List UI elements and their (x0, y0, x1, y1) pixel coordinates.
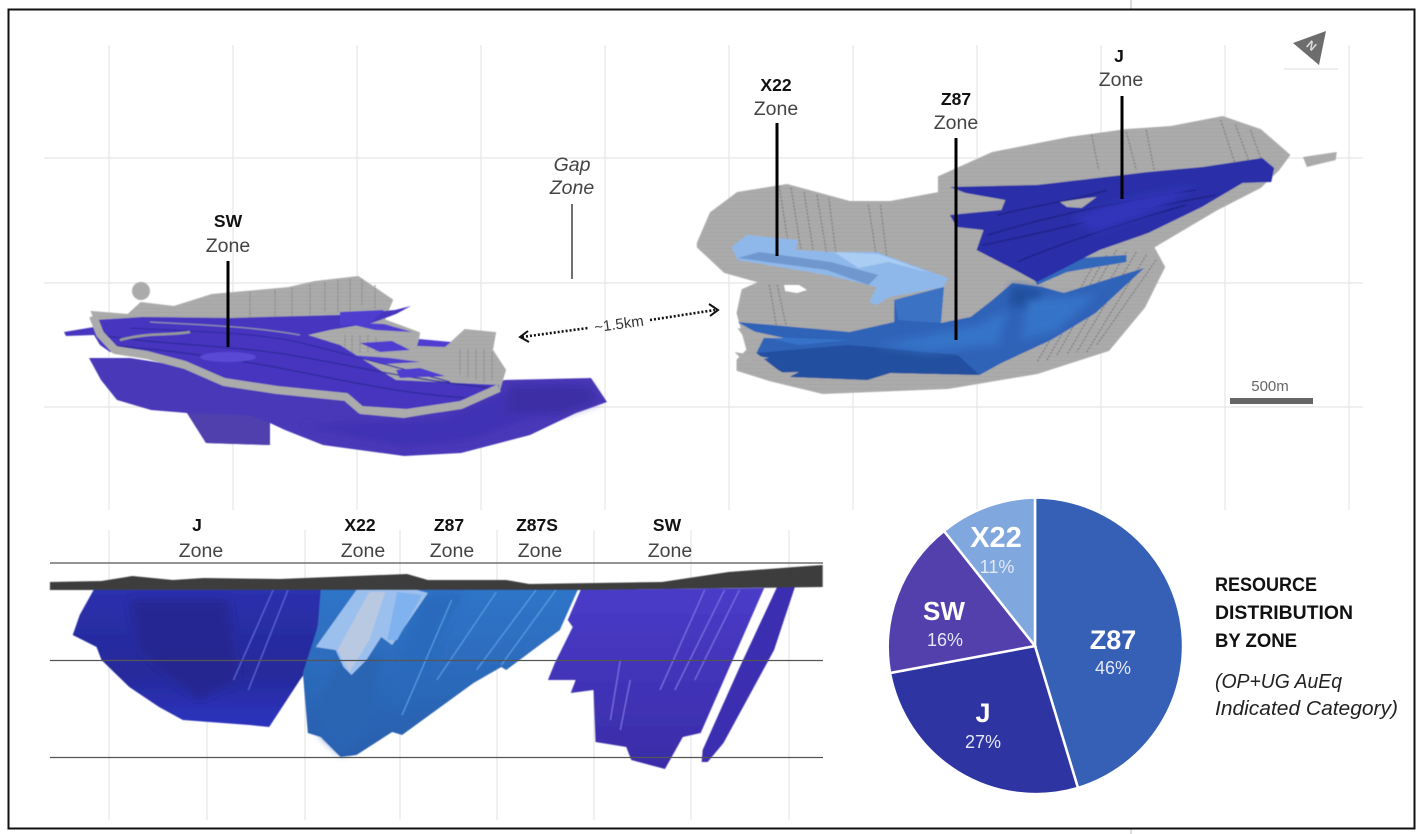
X22 plan label: X22 (760, 75, 792, 95)
section: J zone (73, 590, 323, 727)
section: Z87 zone (303, 590, 578, 757)
chart title: (OP+UG AuEq (1215, 671, 1342, 693)
chart title: DISTRIBUTION (1215, 603, 1353, 624)
slice: SW (888, 531, 1035, 673)
section Z87 label (430, 515, 474, 562)
section X22 label (341, 515, 385, 562)
section depth lines (50, 563, 823, 758)
section: X22 zone (316, 590, 428, 675)
north arrow: N (1304, 38, 1319, 54)
J plan label (1099, 46, 1143, 199)
pie chart (888, 498, 1183, 794)
SW plan label (206, 211, 250, 347)
section J label: J (192, 515, 202, 535)
pie labels: 27% (965, 732, 1001, 752)
SW zone 3D model (64, 277, 607, 456)
pie labels: 11% (980, 557, 1014, 577)
scale bar (1230, 378, 1313, 404)
section Z87S label: Zone (518, 540, 562, 562)
Gap label: Gap (554, 154, 591, 176)
section SW label (648, 515, 692, 562)
section: SW zone (548, 587, 795, 769)
pie labels: Z87 (1090, 625, 1136, 655)
slice: Z87 (1035, 498, 1183, 788)
north arrow (1284, 31, 1338, 69)
J plan label: Zone (1099, 69, 1143, 91)
SW plan label: Zone (206, 235, 250, 257)
section view (50, 565, 823, 769)
distance arrow (520, 304, 718, 342)
scale bar: 500m (1251, 378, 1289, 395)
section J label (179, 515, 223, 562)
section SW label: SW (653, 515, 682, 535)
Gap label (549, 154, 594, 279)
chart title: Indicated Category) (1215, 698, 1398, 720)
chart title: RESOURCE (1215, 575, 1317, 596)
pie labels: 46% (1095, 658, 1131, 678)
distance arrow: ~1.5km (593, 313, 645, 336)
section Z87 label: Zone (430, 540, 474, 562)
section SW label: Zone (648, 540, 692, 562)
SW plan label: SW (214, 211, 243, 231)
Eastern zones 3D model (698, 117, 1337, 393)
pie labels: J (975, 698, 991, 728)
section Z87S label (516, 515, 562, 562)
slice: J (890, 646, 1078, 794)
plan view grid (44, 45, 1363, 510)
section X22 label: Zone (341, 540, 385, 562)
section Z87S label: Z87S (516, 515, 558, 535)
section J label: Zone (179, 540, 223, 562)
pie labels: X22 (970, 522, 1022, 554)
X22 plan label (754, 75, 798, 256)
X22 plan label: Zone (754, 98, 798, 120)
section view grid (109, 530, 789, 820)
section: terrain surface (50, 565, 823, 590)
pie labels: 16% (927, 630, 963, 650)
chart title (1215, 575, 1398, 720)
slice: X22 (944, 498, 1035, 646)
pie labels: SW (923, 596, 965, 626)
chart title: BY ZONE (1215, 631, 1297, 652)
section Z87 label: Z87 (434, 515, 464, 535)
J plan label: J (1114, 46, 1124, 66)
Gap label: Zone (549, 177, 594, 199)
section X22 label: X22 (344, 515, 376, 535)
Z87 plan label (934, 89, 978, 340)
Z87 plan label: Z87 (941, 89, 971, 109)
pie labels (923, 522, 1136, 752)
Z87 plan label: Zone (934, 112, 978, 134)
